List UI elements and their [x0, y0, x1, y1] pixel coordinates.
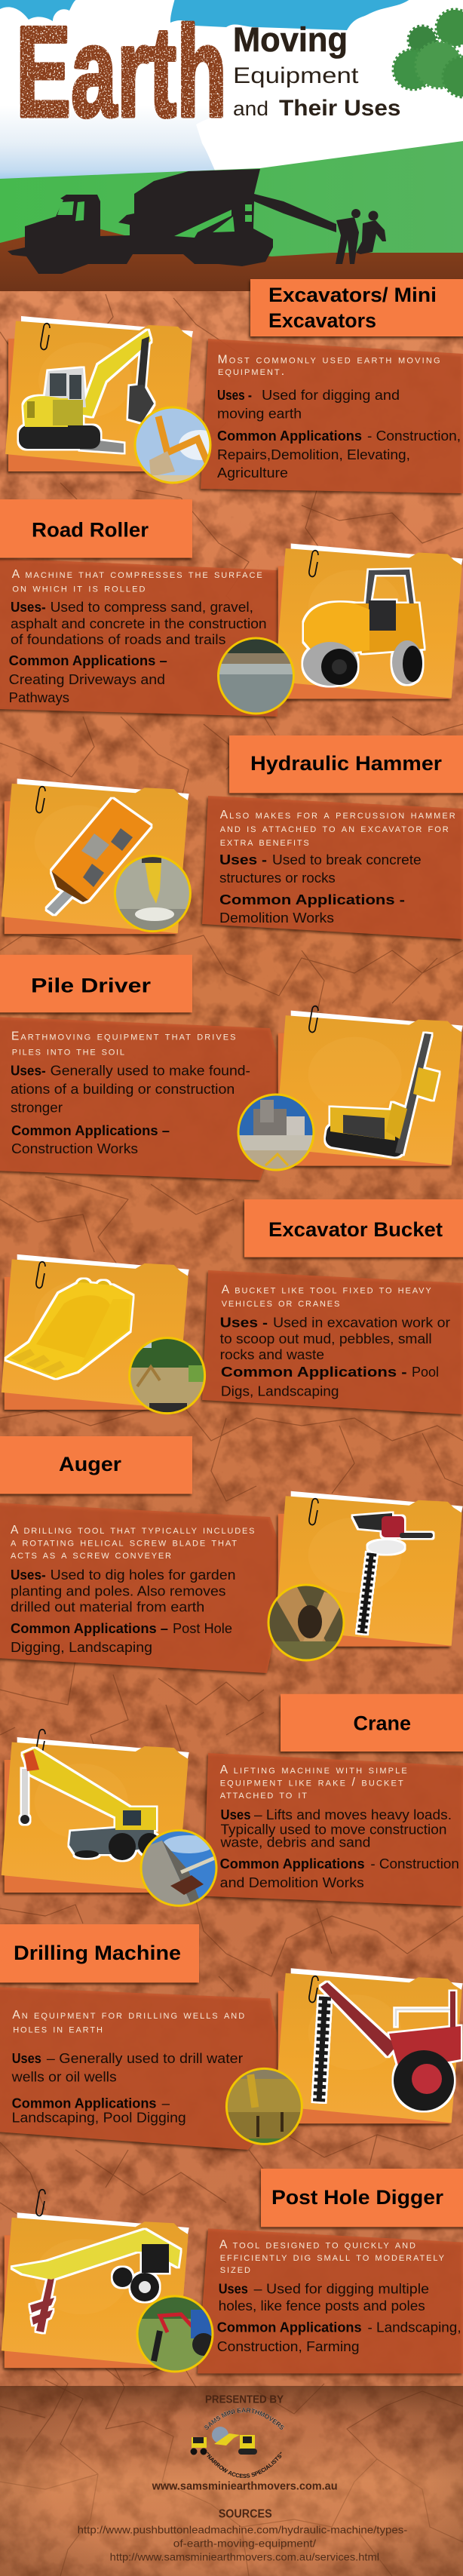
- heading box: Excavators: [268, 309, 376, 332]
- heading box: [261, 2169, 463, 2227]
- uses: – Used for digging multiple: [254, 2281, 429, 2296]
- uses: Used to compress sand, gravel,: [51, 600, 253, 615]
- hydraulic hammer machine: [47, 799, 151, 914]
- paper clip: [309, 1976, 318, 2002]
- common applications: Common Applications: [12, 2095, 157, 2111]
- tree: [394, 10, 463, 97]
- heading box: [0, 499, 192, 558]
- footer panel shading: [0, 2386, 463, 2576]
- title: and Their Uses: Their Uses: [279, 96, 401, 121]
- sources list: http://www.pushbuttonleadmachine.com/hydraulic-machine/types-: [78, 2524, 408, 2536]
- footer: [78, 2393, 408, 2563]
- heading box: Excavators/ Mini: [268, 284, 437, 306]
- logo top arc text: SAMS MINI EARTHMOVERS: [204, 2408, 284, 2430]
- folder: [2, 1254, 189, 1410]
- description line 3: sized: [220, 2263, 250, 2276]
- uses: [219, 852, 422, 886]
- description line 2: holes in earth: [13, 2023, 103, 2036]
- uses: Used for digging and: [262, 388, 400, 403]
- title: and Their Uses: and: [233, 97, 268, 120]
- uses: Typically used to move construction: [220, 1822, 446, 1837]
- crane machine: [20, 1749, 161, 1860]
- uses: waste, debris and sand: [219, 1835, 370, 1850]
- common applications: –: [162, 2095, 170, 2111]
- description: Also makes for a percussion hammer: [220, 809, 455, 821]
- uses: Used to dig holes for garden: [51, 1567, 235, 1583]
- common applications: [12, 2095, 186, 2126]
- sky haze: [0, 106, 219, 181]
- section: Excavator Bucket: [2, 1199, 463, 1414]
- description: A bucket like tool fixed to heavy: [222, 1284, 431, 1297]
- uses: moving earth: [217, 407, 302, 422]
- brown soil: [0, 229, 463, 291]
- uses: holes, like fence posts and poles: [219, 2298, 425, 2313]
- section: Auger: [0, 1436, 463, 1673]
- common applications: Post Hole: [173, 1621, 232, 1636]
- heading box: Hydraulic Hammer: [250, 752, 442, 775]
- description: A drilling tool that typically includes: [11, 1524, 255, 1537]
- section: Road Roller: [0, 499, 463, 717]
- folder: [275, 543, 463, 698]
- text panel: [201, 339, 463, 493]
- description line 3: attached to it: [220, 1788, 307, 1801]
- folder: [2, 1737, 189, 1893]
- header scene: [0, 0, 463, 302]
- common applications: Common Applications -: [221, 1365, 407, 1380]
- excavator bucket: [6, 1279, 133, 1378]
- sources heading: SOURCES: [219, 2507, 272, 2521]
- uses: planting and poles. Also removes: [11, 1584, 226, 1599]
- heading box: [244, 1199, 463, 1257]
- common applications: Agriculture: [217, 465, 288, 481]
- uses: [219, 1807, 452, 1850]
- description line 3: acts as a screw conveyer: [11, 1549, 171, 1561]
- common applications: Creating Driveways and: [9, 672, 165, 687]
- uses: – Generally used to drill water: [47, 2051, 243, 2066]
- uses: Uses -: [219, 852, 267, 867]
- common applications: Pathways: [9, 690, 69, 705]
- drilling machine tractor: [319, 1982, 461, 2111]
- title: Earth: Earth: [16, 0, 227, 144]
- uses: Uses: [12, 2051, 41, 2066]
- folder: [275, 1968, 463, 2123]
- folder: [275, 1491, 463, 1647]
- common applications: and Demolition Works: [220, 1875, 364, 1890]
- description line 2: equipment.: [218, 365, 284, 378]
- description: A tool designed to quickly and: [219, 2238, 415, 2251]
- sources list: [78, 2524, 408, 2563]
- presented by heading: PRESENTED BY: [205, 2393, 284, 2406]
- description line 3: extra benefits: [220, 836, 309, 849]
- paper clip: [309, 1006, 318, 1032]
- clouds: [0, 0, 463, 115]
- text panel: [0, 1503, 277, 1673]
- section: Hydraulic Hammer: [2, 735, 463, 939]
- section: Excavators / Mini Excavators: [5, 279, 463, 493]
- common applications: Construction Works: [11, 1141, 138, 1156]
- common applications: Pool: [412, 1365, 439, 1380]
- website url: www.samsminiearthmovers.com.au: [152, 2480, 338, 2492]
- section: Pile Driver: [0, 955, 463, 1180]
- folder: [2, 778, 189, 934]
- uses: Uses -: [220, 1315, 268, 1330]
- uses: ations of a building or construction: [11, 1082, 235, 1097]
- uses: [11, 2051, 243, 2084]
- uses: drilled out material from earth: [11, 1600, 204, 1615]
- heading box: Post Hole Digger: [271, 2186, 443, 2209]
- section: Crane: [2, 1694, 463, 1907]
- photo circle: [141, 1830, 218, 1907]
- photo circle: [218, 638, 295, 714]
- common applications: Common Applications –: [9, 653, 167, 668]
- photo circle: [238, 1095, 314, 1170]
- common applications: [217, 2320, 461, 2354]
- concrete mixer truck silhouette: [8, 169, 336, 274]
- heading box: Pile Driver: [31, 975, 151, 997]
- logo bottom arc text: "NARROW ACCESS SPECIALISTS": [207, 2452, 282, 2478]
- common applications: [219, 892, 405, 926]
- common applications: [220, 1856, 459, 1890]
- text panel: [204, 1753, 463, 1906]
- paper clip: [41, 324, 50, 349]
- excavator machine: [19, 330, 154, 453]
- title: Moving: Moving: [233, 20, 348, 59]
- uses: – Lifts and moves heavy loads.: [254, 1807, 452, 1822]
- uses: [11, 1064, 250, 1115]
- uses: Uses: [220, 1807, 250, 1822]
- green hill: [0, 141, 463, 302]
- sources list: http://www.samsminiearthmovers.com.au/services.html: [110, 2551, 379, 2563]
- heading box: Road Roller: [32, 519, 149, 542]
- uses: Uses: [219, 2281, 248, 2296]
- uses: of foundations of roads and trails: [11, 632, 226, 647]
- post hole digger machine: [12, 2230, 180, 2332]
- heading box: Crane: [353, 1712, 411, 1735]
- heading box: [250, 279, 463, 336]
- workers silhouette: [336, 209, 386, 264]
- pile driver machine: [324, 1033, 439, 1158]
- right cloud: [196, 106, 463, 187]
- uses: Used in excavation work or: [273, 1315, 450, 1330]
- description: Earthmoving equipment that drives: [11, 1030, 235, 1043]
- description line 2: efficiently dig small to moderately: [220, 2251, 445, 2264]
- logo boulder: [212, 2427, 228, 2443]
- uses: Generally used to make found-: [51, 1064, 250, 1079]
- common applications: [9, 653, 167, 705]
- uses: structures or rocks: [219, 870, 336, 886]
- uses: asphalt and concrete in the construction: [11, 616, 267, 631]
- text panel: [202, 1270, 463, 1414]
- logo skid steer: [190, 2437, 207, 2455]
- section: Post Hole Digger: [2, 2169, 463, 2373]
- common applications: Common Applications: [220, 1856, 365, 1871]
- section: Drilling Machine: [0, 1924, 463, 2150]
- text panel: [0, 558, 277, 717]
- photo circle: [135, 407, 221, 484]
- common applications: Common Applications -: [219, 892, 405, 907]
- common applications: Repairs,Demolition, Elevating,: [217, 447, 410, 462]
- common applications: [221, 1365, 439, 1399]
- heading box: Auger: [59, 1453, 121, 1475]
- common applications: [217, 428, 461, 481]
- description: An equipment for drilling wells and: [12, 2009, 244, 2022]
- common applications: Common Applications –: [11, 1123, 170, 1138]
- folder: [275, 1011, 463, 1166]
- uses: [219, 2281, 429, 2313]
- common applications: Digs, Landscaping: [221, 1383, 339, 1399]
- title: and Their Uses: [233, 96, 401, 121]
- description line 2: equipment like rake / bucket: [220, 1776, 403, 1788]
- uses: Uses-: [11, 1064, 46, 1079]
- paper clip: [309, 551, 318, 576]
- uses: [220, 1315, 450, 1362]
- heading box: [0, 955, 192, 1012]
- uses: rocks and waste: [220, 1347, 324, 1362]
- common applications: Construction, Farming: [217, 2339, 359, 2354]
- uses: [11, 1567, 235, 1615]
- uses: stronger: [11, 1100, 63, 1115]
- common applications: Landscaping, Pool Digging: [12, 2111, 186, 2126]
- common applications: Common Applications –: [11, 1621, 168, 1636]
- description line 2: on which it is rolled: [12, 582, 145, 594]
- folder: [5, 316, 193, 471]
- uses: Uses -: [217, 388, 252, 403]
- photo circle: [115, 855, 192, 933]
- common applications: - Construction,: [367, 428, 461, 444]
- paper clip: [36, 2190, 45, 2215]
- heading box: Excavator Bucket: [268, 1218, 443, 1241]
- description line 2: and is attached to an excavator for: [220, 822, 449, 835]
- text panel: [0, 1987, 277, 2150]
- logo mini excavator: [214, 2433, 257, 2455]
- description line 2: vehicles or cranes: [222, 1297, 339, 1309]
- description: A lifting machine with simple: [220, 1764, 407, 1776]
- description line 2: a rotating helical screw blade that: [11, 1536, 237, 1549]
- road roller machine: [303, 570, 424, 686]
- photo circle: [226, 2068, 303, 2146]
- description: Most commonly used earth moving: [218, 353, 440, 366]
- text panel: [198, 2228, 463, 2373]
- auger machine: [353, 1513, 433, 1633]
- uses: [217, 388, 400, 422]
- paper clip: [36, 787, 45, 812]
- logo: Sams Mini Earthmovers: [190, 2408, 284, 2478]
- common applications: [11, 1123, 170, 1156]
- common applications: - Landscaping,: [368, 2320, 461, 2335]
- description: A machine that compresses the surface: [12, 568, 262, 581]
- heading box: [229, 735, 463, 793]
- common applications: Demolition Works: [219, 910, 334, 926]
- description line 2: piles into the soil: [12, 1045, 124, 1058]
- common applications: Digging, Landscaping: [11, 1640, 152, 1655]
- paper clip: [309, 1499, 318, 1524]
- uses: Uses-: [11, 600, 46, 615]
- text panel: [0, 1017, 277, 1180]
- uses: Uses-: [11, 1567, 46, 1583]
- photo circle: [137, 2296, 215, 2373]
- common applications: - Construction: [370, 1856, 459, 1871]
- photo circle: [129, 1337, 207, 1414]
- uses: wells or oil wells: [11, 2069, 117, 2084]
- common applications: Common Applications: [217, 428, 362, 444]
- uses: [11, 600, 267, 647]
- uses: Used to break concrete: [272, 852, 422, 867]
- paper clip: [36, 1262, 45, 1288]
- photo circle: [268, 1584, 344, 1662]
- paper clip: [36, 1730, 45, 1755]
- title: Equipment: Equipment: [233, 63, 359, 88]
- common applications: [11, 1621, 232, 1655]
- uses: to scoop out mud, pebbles, small: [220, 1331, 432, 1346]
- sky: [0, 0, 463, 181]
- common applications: Common Applications: [217, 2320, 362, 2335]
- heading box: [0, 1436, 192, 1494]
- sources list: of-earth-moving-equipment/: [173, 2538, 316, 2550]
- heading box: [281, 1694, 463, 1752]
- heading box: Drilling Machine: [14, 1942, 181, 1964]
- text panel: [202, 796, 463, 939]
- heading box: [0, 1924, 199, 1982]
- folder: [2, 2212, 189, 2368]
